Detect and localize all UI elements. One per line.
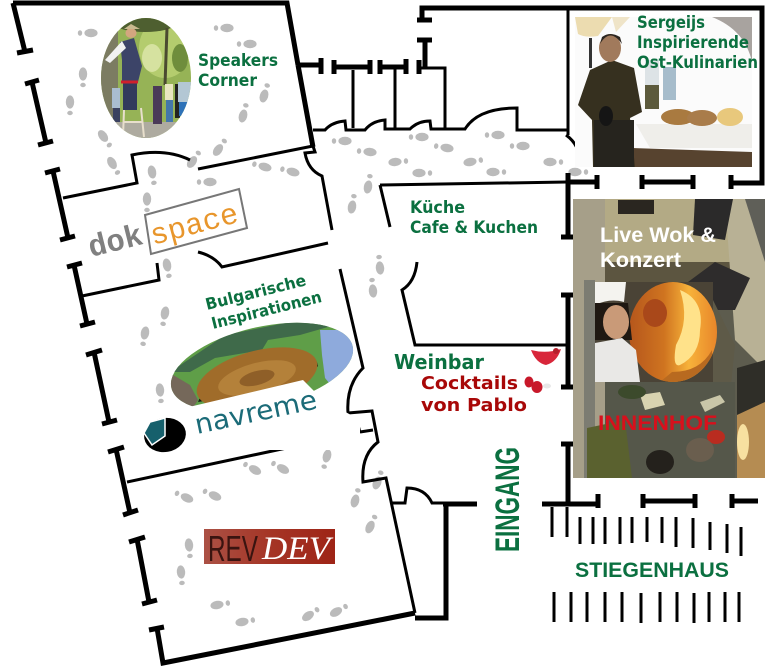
footprints trail [66, 24, 588, 627]
heading: Live Wok & Konzert [600, 224, 716, 272]
heading: Sergeijs Inspirierende Ost-Kulinarien: Ost-Kulinarien [637, 53, 758, 72]
logo: REVDEV: DEV [261, 531, 334, 567]
photo: chef and wok flames [595, 282, 717, 382]
heading: Sergeijs Inspirierende Ost-Kulinarien: Inspirierende [637, 33, 749, 52]
label: EINGANG: EINGANG [489, 447, 527, 552]
heading: Bulgarische Inspirationen: Inspirationen [209, 287, 324, 333]
stairs: lower steps [554, 592, 739, 623]
heading: Live Wok & Konzert: Konzert [600, 249, 681, 272]
heading: Bulgarische Inspirationen: Bulgarische [203, 270, 308, 314]
heading: Sergeijs Inspirierende Ost-Kulinarien: Sergeijs [637, 13, 705, 32]
photo: speaker on ladder oval [100, 16, 193, 140]
icon: strawberries [524, 376, 551, 393]
icon: cocktail glass [531, 348, 561, 365]
logo: navreme [141, 385, 320, 455]
logo: navreme: navreme [192, 385, 320, 441]
heading: Cocktails von Pablo: von Pablo [421, 396, 527, 416]
logo: REVDEV: REV [208, 528, 258, 569]
label: STIEGENHAUS: STIEGENHAUS [575, 559, 729, 582]
heading: Speakers Corner [198, 51, 278, 90]
heading: Speakers Corner: Speakers [198, 51, 278, 70]
heading: Cocktails von Pablo [421, 374, 527, 416]
photo: Sergeijs buffet [575, 17, 752, 167]
logo: dokspace [85, 189, 247, 267]
heading: Live Wok & Konzert: Live Wok & [600, 224, 716, 247]
heading: Küche Cafe & Kuchen: Cafe & Kuchen [410, 218, 538, 237]
image: Bulgaria map with pastry [160, 320, 360, 450]
heading: Küche Cafe & Kuchen: Küche [410, 198, 465, 217]
photo: courtyard from above [573, 199, 765, 478]
stairs: upper steps [552, 507, 741, 556]
heading: Weinbar: Weinbar [394, 350, 484, 374]
logo: REVDEV [204, 528, 335, 569]
logo: dokspace: space [147, 199, 243, 255]
heading: Bulgarische Inspirationen [203, 270, 324, 333]
heading: Sergeijs Inspirierende Ost-Kulinarien [637, 13, 758, 72]
heading: Cocktails von Pablo: Cocktails [421, 374, 518, 394]
heading: Speakers Corner: Corner [198, 71, 258, 90]
heading: Küche Cafe & Kuchen [410, 198, 538, 237]
label: INNENHOF: INNENHOF [598, 412, 717, 435]
logo: dokspace: dok [85, 219, 147, 267]
